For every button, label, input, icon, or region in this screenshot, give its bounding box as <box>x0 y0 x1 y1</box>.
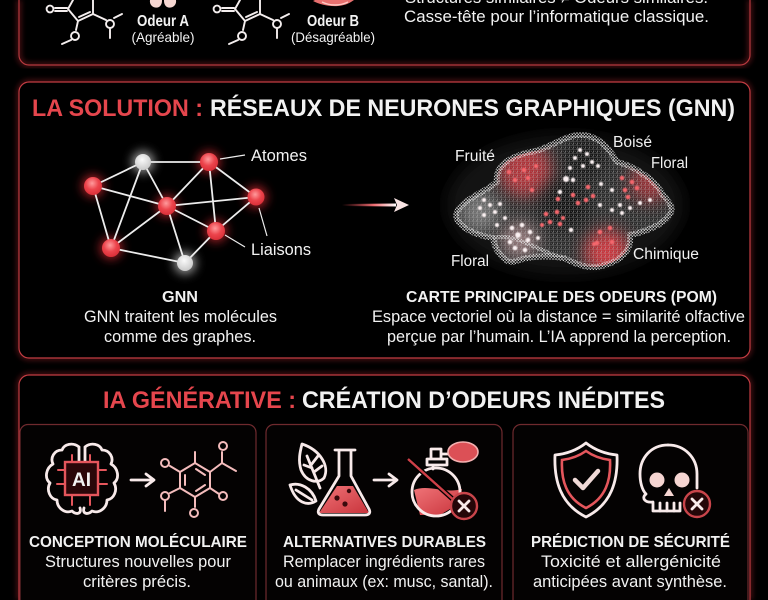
text: sustainable alternatives <box>275 534 493 591</box>
text: safety prediction: anticipées avant synthèse. <box>533 573 727 591</box>
heading: solution: RÉSEAUX DE NEURONES GRAPHIQUES (GNN) <box>210 94 735 122</box>
text: safety prediction: PRÉDICTION DE SÉCURITÉ <box>531 534 730 551</box>
panel: generative AI <box>19 375 750 600</box>
heading: generative AI <box>103 386 665 414</box>
labels: atoms and bonds <box>251 147 311 259</box>
chart: molecular graph <box>82 147 311 274</box>
panel: solution <box>19 82 750 358</box>
chart: principal odour map <box>440 125 699 275</box>
molecule A <box>47 0 122 44</box>
icon: leaves and flask <box>290 444 370 515</box>
labels: odour families: Floral <box>651 155 688 172</box>
icon: AI brain <box>46 444 118 513</box>
text: POM: perçue par l’humain. L’IA apprend la perception. <box>387 328 731 346</box>
icon: odour B <box>313 0 354 6</box>
card: safety prediction <box>513 424 748 600</box>
labels: odour families: Fruité <box>455 148 495 165</box>
text: molecular design: CONCEPTION MOLÉCULAIRE <box>29 534 247 551</box>
label: odour A: Odeur A <box>137 13 189 30</box>
card: sustainable alternatives <box>266 424 502 600</box>
text: POM <box>372 289 745 346</box>
text: molecular design <box>29 534 247 591</box>
text: POM: Espace vectoriel où la distance = similarité olfactive <box>372 308 745 326</box>
arrow: AI to molecule <box>131 474 154 486</box>
heading: generative AI: IA GÉNÉRATIVE : <box>103 386 296 414</box>
label: odour A: (Agréable) <box>132 29 194 45</box>
text: sustainable alternatives: Remplacer ingrédients rares <box>283 553 485 571</box>
text: GNN: comme des graphes. <box>104 328 256 346</box>
text: safety prediction <box>531 534 730 591</box>
text: GNN: GNN traitent les molécules <box>84 308 277 326</box>
heading: generative AI: CRÉATION D’ODEURS INÉDITES <box>302 386 665 414</box>
text: molecular design: Structures nouvelles pour <box>45 553 231 571</box>
text: GNN: GNN <box>162 289 198 306</box>
icon: designed molecule <box>161 442 236 517</box>
text: sustainable alternatives: ou animaux (ex: musc, santal). <box>275 573 493 591</box>
labels: odour families: Floral <box>451 253 489 270</box>
card: molecular design <box>20 424 256 600</box>
text: molecular design: critères précis. <box>83 573 191 591</box>
icon: shield <box>555 443 617 517</box>
molecule B <box>214 0 289 44</box>
heading: solution: LA SOLUTION : <box>32 95 203 122</box>
icon: odour A <box>150 0 176 8</box>
label: odour B: Odeur B <box>307 13 359 30</box>
labels: odour families: Chimique <box>633 246 699 263</box>
labels: odour families <box>451 134 699 270</box>
labels: atoms and bonds: Atomes <box>251 147 307 165</box>
text: POM: CARTE PRINCIPALE DES ODEURS (POM) <box>406 289 717 306</box>
text: safety prediction: Toxicité et allergénicité <box>541 553 721 571</box>
text: problem description: Casse-tête pour l’informatique classique. <box>404 7 709 26</box>
arrow: graph to map <box>342 198 409 212</box>
arrow: flask to perfume <box>374 474 397 486</box>
icon: crossed-out perfume <box>408 442 478 519</box>
label: odour B <box>291 13 375 45</box>
label: odour B: (Désagréable) <box>291 29 375 45</box>
labels: atoms and bonds: Liaisons <box>251 241 311 259</box>
icon: AI brain: AI <box>72 470 91 491</box>
labels: odour families: Boisé <box>613 134 652 151</box>
label: odour A <box>132 13 194 45</box>
panel: problem (top) <box>19 0 750 65</box>
text: GNN <box>84 289 277 346</box>
text: sustainable alternatives: ALTERNATIVES DURABLES <box>283 534 486 551</box>
icon: skull <box>640 445 710 517</box>
